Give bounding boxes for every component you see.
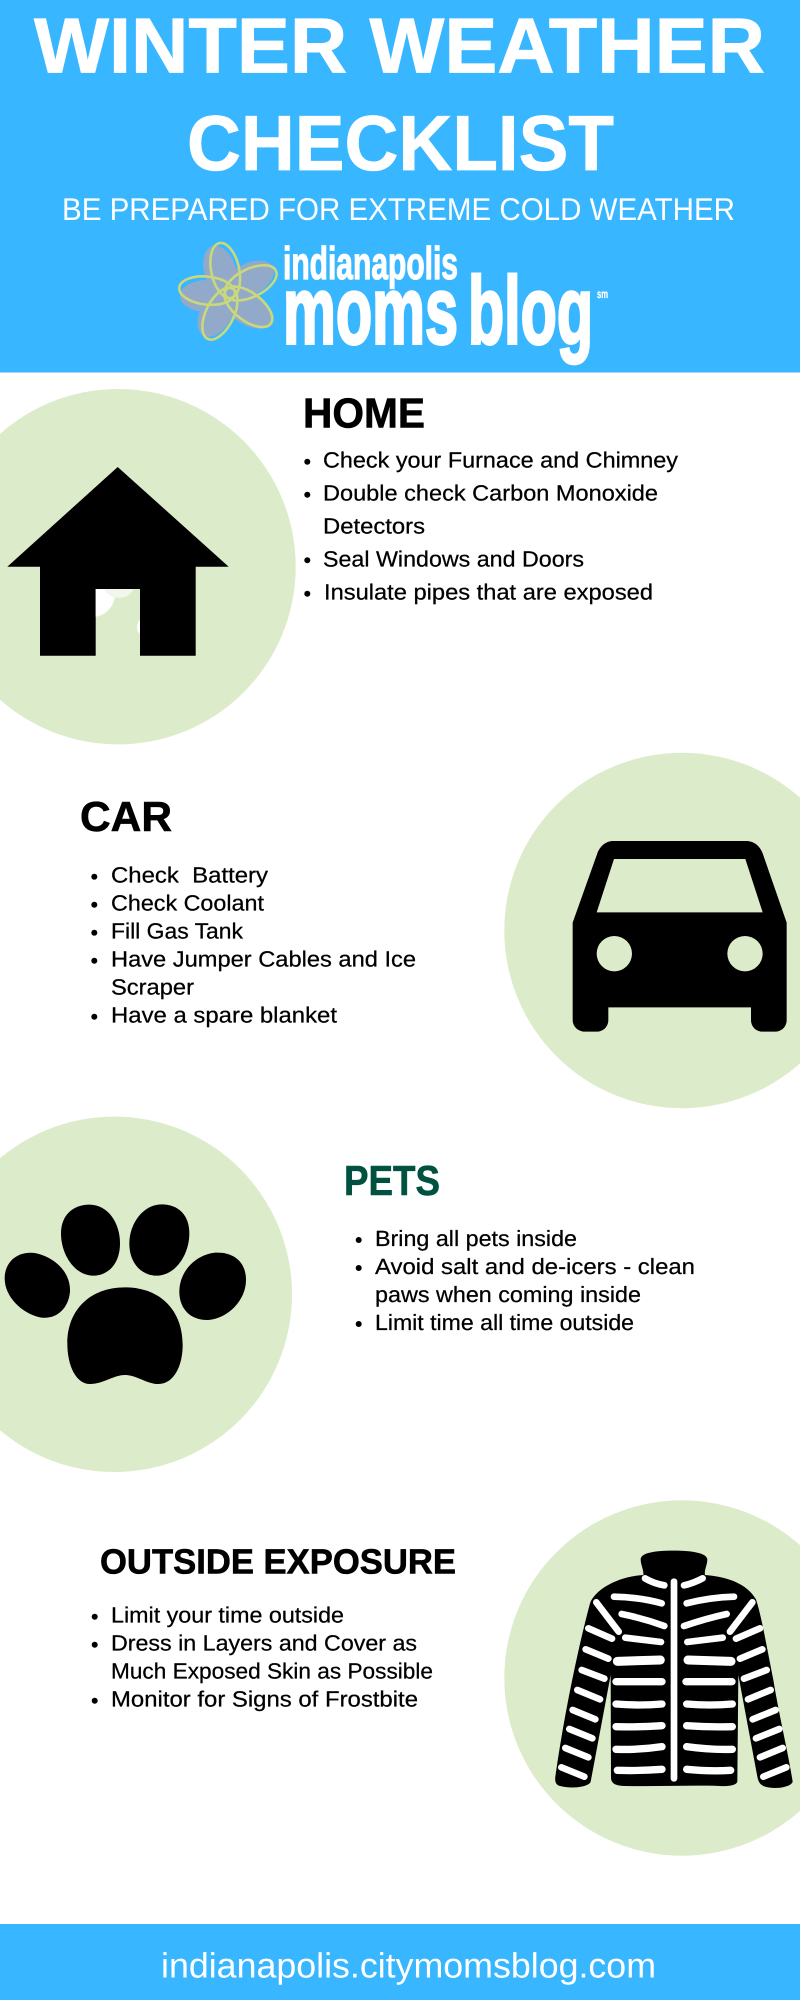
title: CHECKLIST (187, 99, 614, 187)
panel: home (0, 389, 678, 744)
list: pets: paws when coming inside (375, 1282, 641, 1307)
icon circle: pets (0, 1117, 292, 1472)
list: home: Seal Windows and Doors (323, 546, 584, 571)
icon: flower (178, 240, 282, 345)
icon circle: car (504, 753, 800, 1108)
logo wordmark: indianapolis (283, 237, 458, 289)
logo wordmark: blog (468, 257, 593, 364)
title (34, 2, 765, 187)
list: pets: Bring all pets inside (375, 1226, 577, 1251)
logo: Indianapolis Moms Blog (178, 237, 608, 364)
panel: header banner (0, 0, 800, 372)
list: outside exposure: Dress in Layers and Cover as (111, 1631, 417, 1656)
icon: paw print (5, 1204, 246, 1384)
list: pets: Limit time all time outside (375, 1310, 634, 1335)
panel: outside exposure (92, 1500, 800, 1856)
logo wordmark: moms (283, 257, 458, 364)
footer url: indianapolis.citymomsblog.com (161, 1947, 656, 1986)
list: home: Detectors (323, 513, 425, 538)
panel: car (80, 753, 800, 1108)
list: pets: Avoid salt and de-icers - clean (375, 1254, 695, 1279)
icon: puffer jacket (555, 1551, 793, 1788)
logo wordmark: sm (597, 287, 608, 301)
list: home (304, 448, 678, 605)
list: outside exposure: Monitor for Signs of Frostbite (111, 1687, 418, 1712)
heading: pets: PETS (344, 1157, 440, 1204)
icon: car (573, 841, 787, 1032)
list: pets (356, 1226, 695, 1335)
list: home: Insulate pipes that are exposed (324, 580, 653, 605)
icon: house (7, 467, 229, 656)
heading: car: CAR (80, 793, 172, 840)
heading: outside exposure: OUTSIDE EXPOSURE (100, 1542, 456, 1581)
list: car: Have a spare blanket (111, 1003, 337, 1028)
list: home: Check your Furnace and Chimney (323, 448, 678, 473)
title: WINTER WEATHER (34, 2, 765, 90)
icon circle: outside exposure (504, 1500, 800, 1856)
panel: footer banner (0, 1924, 800, 2000)
list: car: Have Jumper Cables and Ice (111, 947, 416, 972)
panel: pets (0, 1117, 695, 1472)
list: car (91, 863, 416, 1028)
list: car: Scraper (111, 975, 194, 1000)
heading: home: HOME (303, 390, 425, 437)
subtitle: BE PREPARED FOR EXTREME COLD WEATHER (62, 191, 735, 227)
list: car: Check Coolant (111, 891, 264, 916)
list: outside exposure: Much Exposed Skin as Possible (111, 1659, 433, 1684)
list: outside exposure: Limit your time outside (111, 1603, 344, 1628)
list: car: Check Battery (111, 863, 268, 888)
list: car: Fill Gas Tank (111, 919, 244, 944)
icon circle: home (0, 389, 296, 744)
list: home: Double check Carbon Monoxide (323, 481, 658, 506)
list: outside exposure (92, 1603, 433, 1712)
